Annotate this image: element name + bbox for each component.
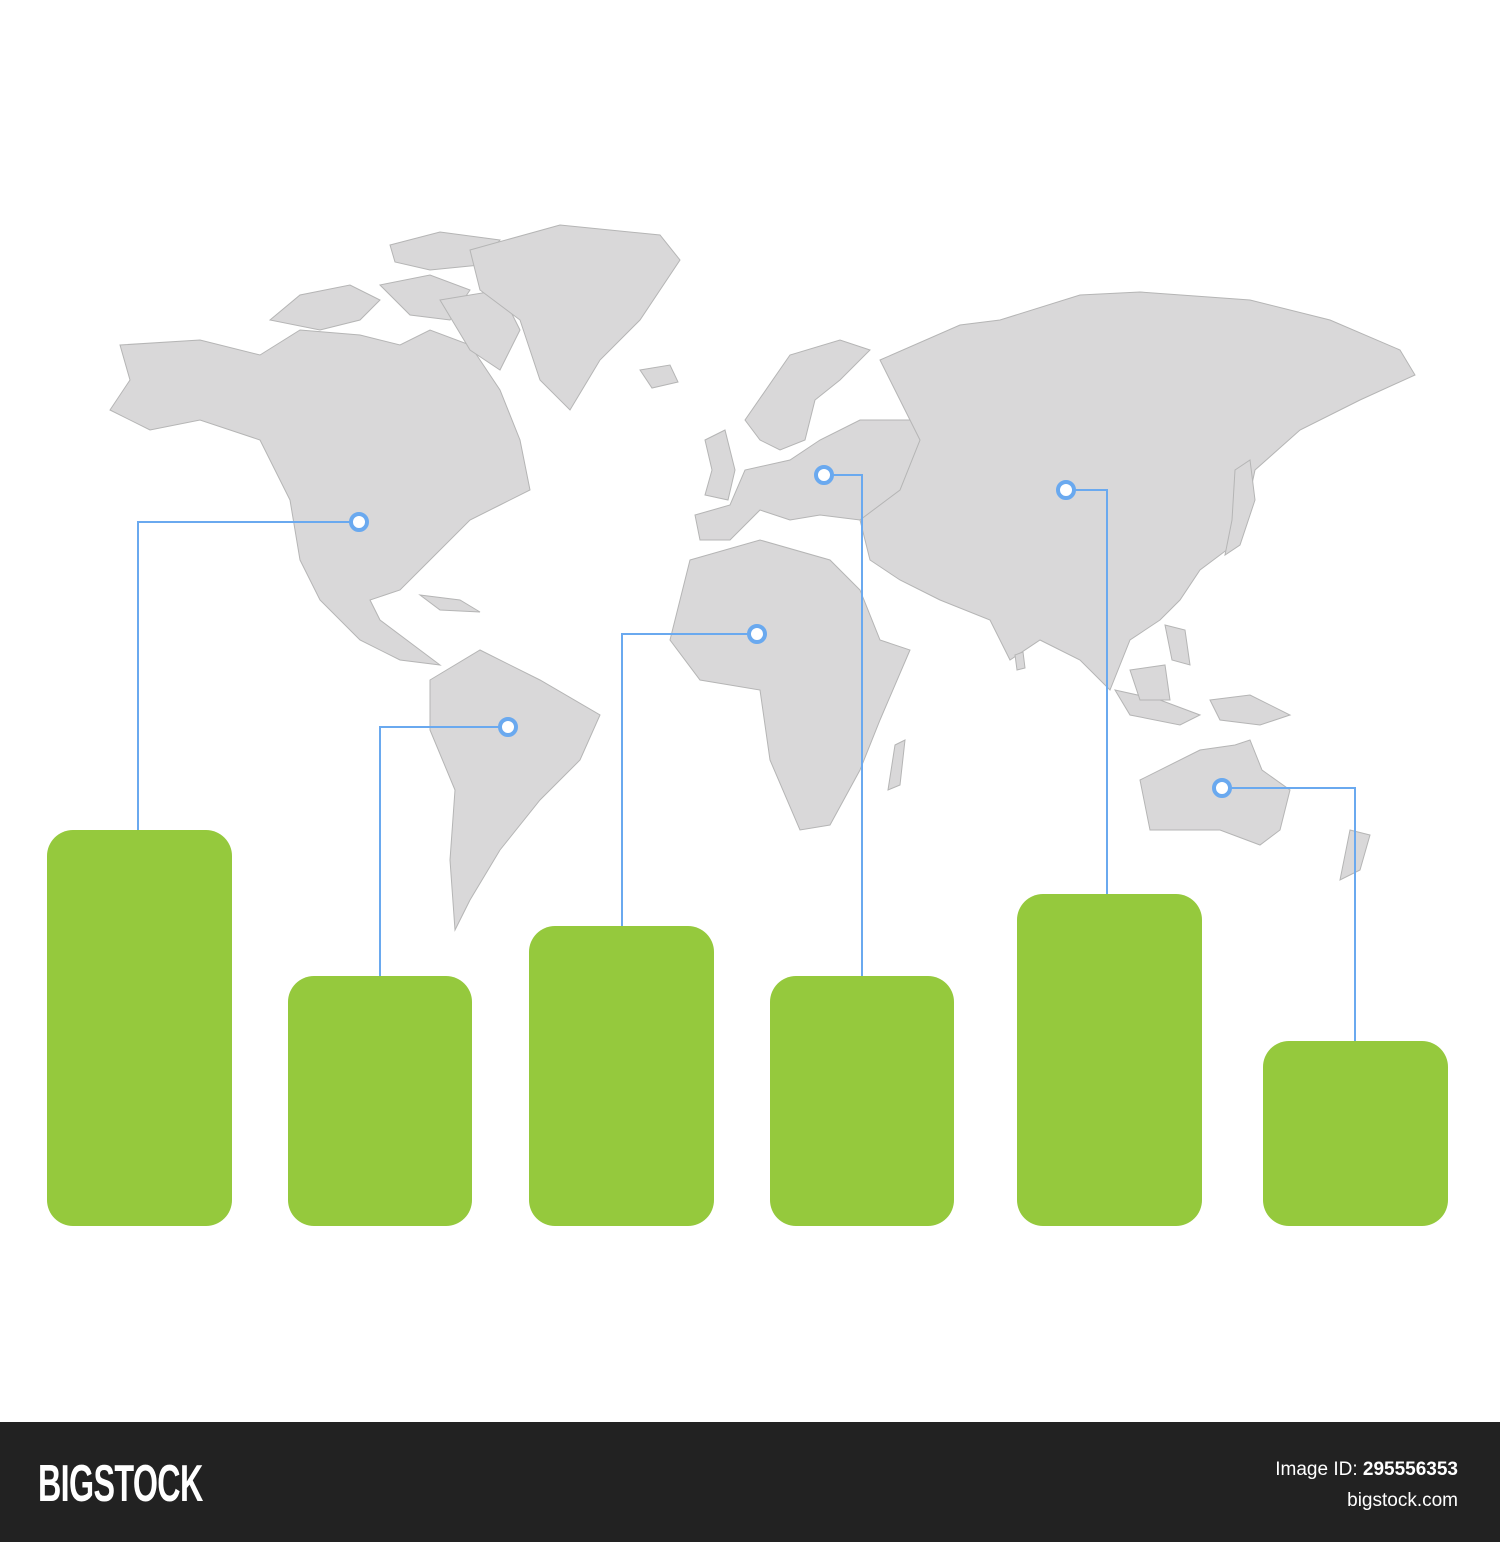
footer <box>0 1422 1500 1542</box>
footer logo: BIGSTOCK <box>38 1455 203 1513</box>
connector lines <box>138 475 1355 1041</box>
southeast asia / indonesia <box>1115 690 1200 725</box>
iceland <box>640 365 678 388</box>
greenland <box>470 225 680 410</box>
south america <box>430 650 600 930</box>
footer image id: bigstock.com <box>1347 1490 1458 1511</box>
location markers <box>351 467 1230 796</box>
europe <box>695 420 930 540</box>
bar 1 <box>47 830 232 1226</box>
new zealand <box>1340 830 1370 880</box>
footer image id: Image ID: 295556353 <box>1275 1459 1458 1480</box>
asia <box>860 292 1415 690</box>
australia <box>1140 740 1290 845</box>
bars <box>47 830 1448 1226</box>
north america <box>110 330 530 665</box>
british isles <box>705 430 735 500</box>
canadian arctic islands <box>270 285 380 330</box>
bar 2 <box>288 976 472 1226</box>
bar 5 <box>1017 894 1202 1226</box>
japan <box>1225 460 1255 555</box>
cuba/caribbean <box>420 595 480 612</box>
africa <box>670 540 910 830</box>
bar 6 <box>1263 1041 1448 1226</box>
madagascar <box>888 740 905 790</box>
bar 4 <box>770 976 954 1226</box>
world map <box>110 225 1415 930</box>
footer image id <box>1275 1459 1458 1511</box>
bar 3 <box>529 926 714 1226</box>
sri lanka <box>1015 652 1025 670</box>
scandinavia <box>745 340 870 450</box>
